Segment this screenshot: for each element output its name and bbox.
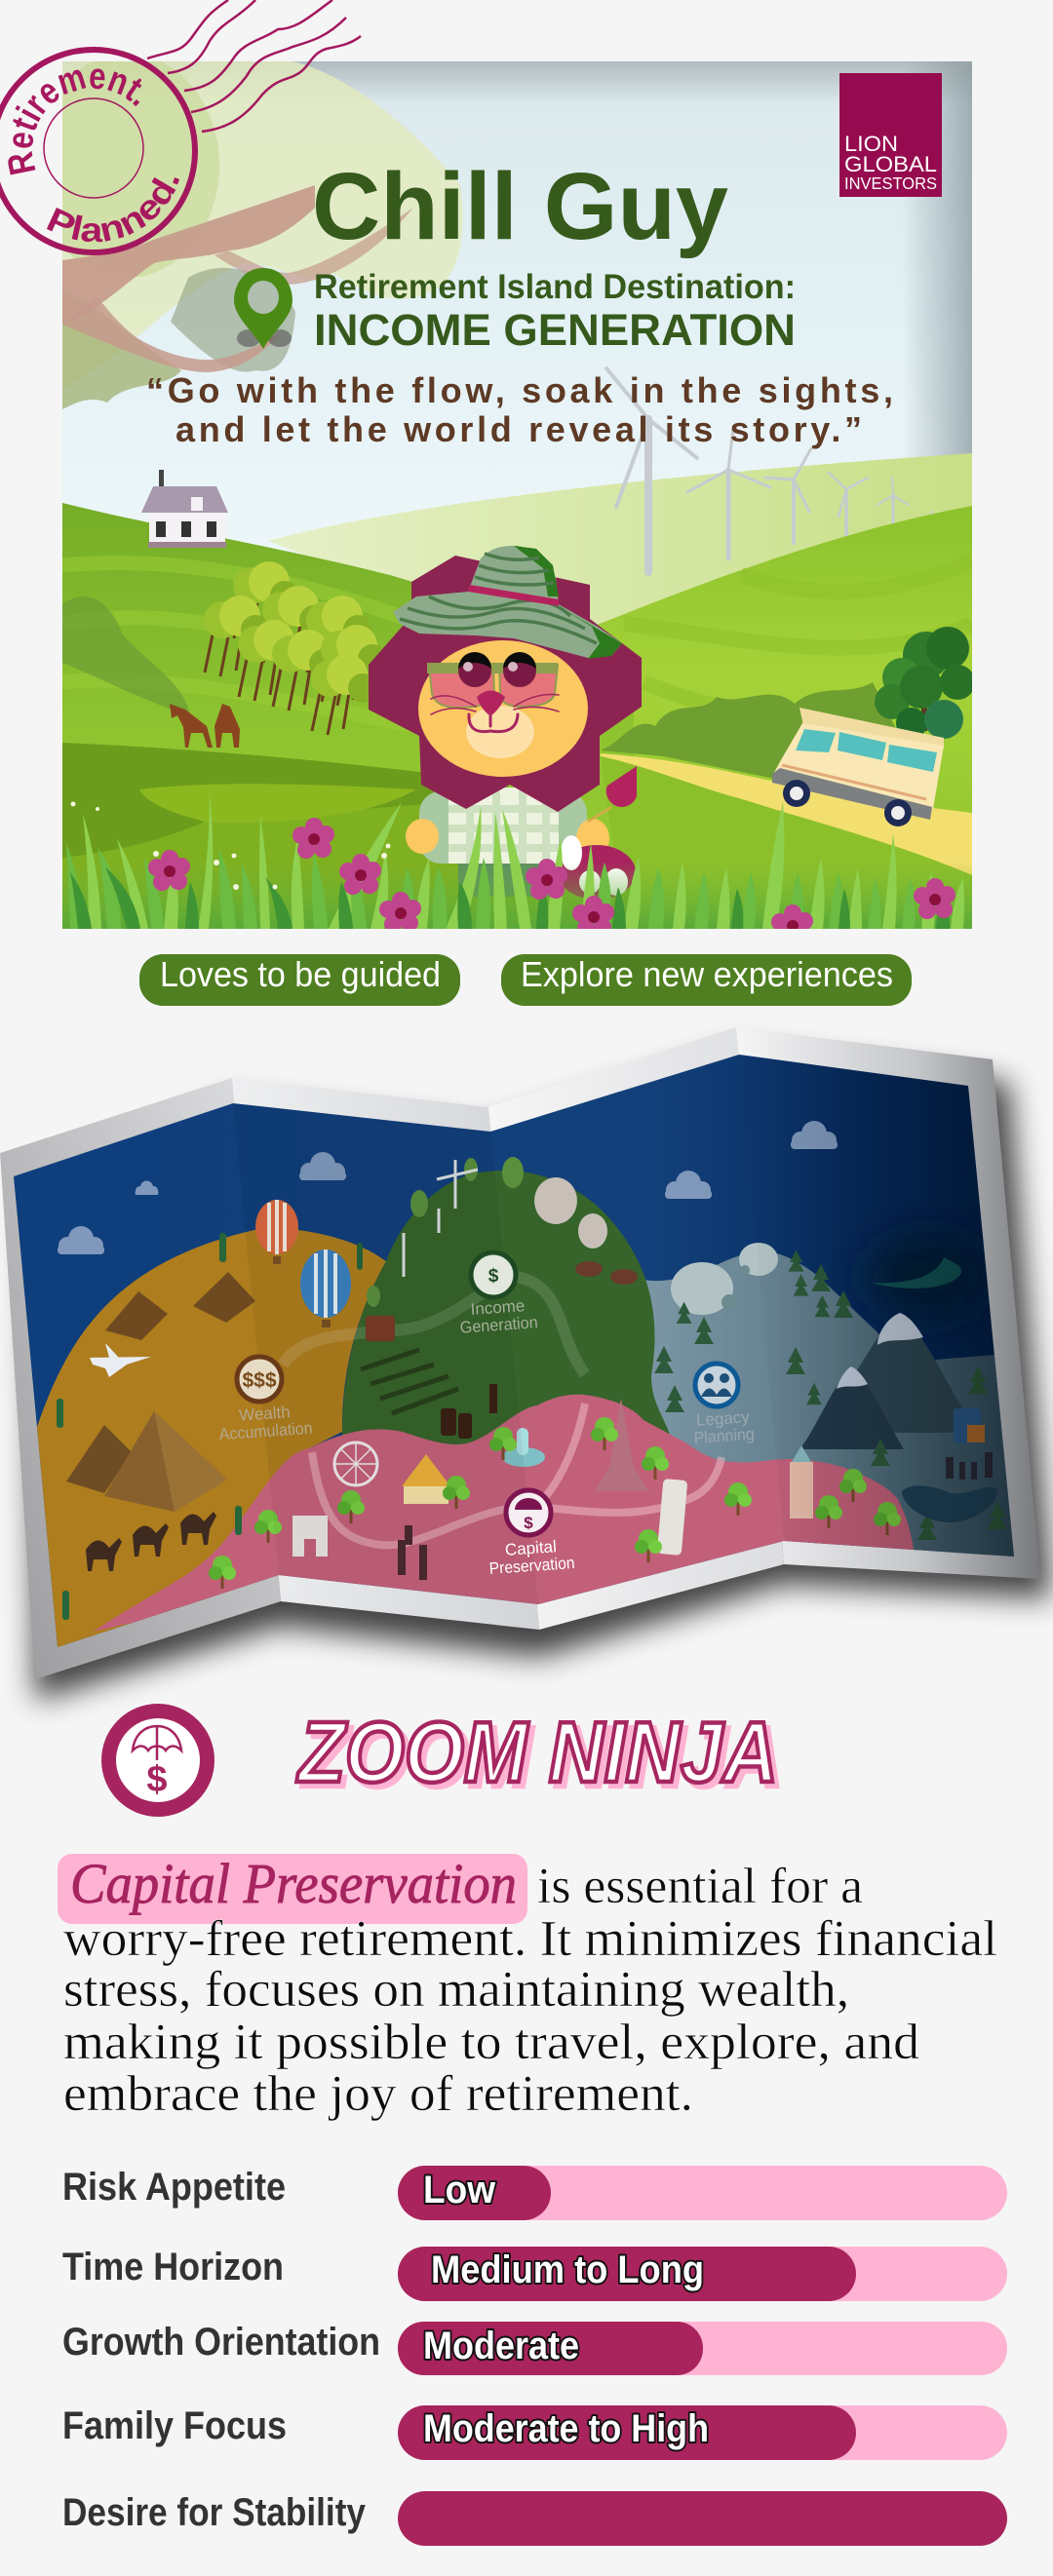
left hill (62, 503, 634, 795)
label: income generation: Income (470, 1296, 526, 1319)
map sky (14, 1055, 1014, 1647)
foreground hill base (62, 805, 630, 910)
right hill (597, 506, 972, 813)
postmark waves (147, 0, 361, 132)
map artwork (14, 1055, 1014, 1647)
attribute: risk appetite: Low (423, 2169, 496, 2211)
forest details (361, 1157, 638, 1439)
attribute: family focus (62, 2404, 1007, 2460)
logo: Lion Global Investors: INVESTORS (844, 173, 937, 193)
label: wealth accumulation: Wealth (239, 1403, 291, 1425)
lion shoe (558, 835, 636, 900)
panel: folded map (0, 1023, 1053, 1701)
attribute: risk appetite: Risk Appetite (62, 2166, 286, 2209)
aurora (868, 1238, 985, 1316)
front hill (610, 764, 952, 867)
label: capital preservation: Preservation (488, 1554, 575, 1578)
icon: capital preservation badge: $ (146, 1759, 168, 1800)
attribute: risk appetite (62, 2166, 1007, 2220)
icon: location pin (234, 268, 292, 349)
quote: “Go with the flow, soak in the sights, (146, 370, 893, 410)
attribute: time horizon (62, 2246, 1007, 2301)
icon: legacy planning (695, 1364, 738, 1406)
icon: wealth accumulation (237, 1357, 282, 1402)
cacti (57, 1233, 363, 1620)
pyramids (66, 1411, 227, 1512)
city roads (312, 1403, 722, 1545)
logo: Lion Global Investors (839, 73, 942, 197)
attribute: desire for stability (62, 2491, 1007, 2546)
clouds (58, 1121, 838, 1254)
label: legacy planning (692, 1407, 755, 1447)
attribute: growth orientation: Growth Orientation (62, 2321, 380, 2364)
attribute: family focus: Moderate to High (423, 2407, 709, 2450)
region: desert (0, 1227, 386, 1657)
igloos (671, 1243, 778, 1315)
description paragraph (63, 1859, 997, 2122)
attribute: desire for stability: Desire for Stability (62, 2491, 367, 2534)
title: Chill Guy (312, 153, 728, 259)
tents (105, 1272, 255, 1340)
hill stripes left (62, 556, 402, 710)
label: wealth accumulation (217, 1402, 313, 1443)
attribute: growth orientation: Moderate (423, 2325, 579, 2367)
lion mane (369, 556, 642, 812)
lion tail (588, 766, 637, 822)
sunglasses (427, 652, 558, 708)
camels (86, 1512, 216, 1571)
mountains (800, 1313, 968, 1449)
subtitle: Retirement Island Destination: (314, 268, 796, 306)
attribute: growth orientation (62, 2321, 1007, 2375)
lion nose, mouth and whiskers (431, 690, 559, 732)
logo: Lion Global Investors: GLOBAL (844, 152, 937, 176)
attribute: time horizon: Medium to Long (431, 2249, 704, 2291)
sky vignette (62, 61, 972, 457)
grass (62, 792, 972, 929)
description paragraph: worry-free retirement. It minimizes financial (63, 1911, 997, 1967)
lion mascot (369, 546, 642, 900)
map paper frame (0, 1027, 1040, 1679)
tree: right (875, 627, 975, 739)
region: ice land (634, 1252, 1019, 1559)
left bushes (62, 596, 190, 716)
attribute: family focus: Family Focus (62, 2404, 287, 2447)
frozen lake (902, 1485, 997, 1522)
description paragraph: stress, focuses on maintaining wealth, (63, 1962, 849, 2018)
right shrubs (601, 682, 907, 780)
label: legacy planning: Planning (693, 1425, 755, 1447)
tree canopy top left (34, 54, 463, 409)
icon: capital preservation (506, 1490, 551, 1535)
background pale hill (268, 453, 972, 625)
label: capital preservation: Capital (504, 1537, 557, 1559)
quote (146, 370, 893, 449)
wind turbines (606, 368, 932, 572)
snow trees (654, 1250, 1007, 1540)
tag pill: loves to be guided: Loves to be guided (160, 954, 441, 994)
postmark stamp (0, 47, 198, 255)
horses (170, 704, 240, 748)
flowers (148, 818, 956, 929)
lion body and shirt (406, 788, 609, 897)
icon: capital preservation: $ (524, 1514, 533, 1532)
mountain village and people (946, 1408, 993, 1480)
balloons (255, 1200, 351, 1327)
airplane (90, 1343, 151, 1377)
stamp text: Retirement. (8, 68, 142, 175)
label: wealth accumulation: Accumulation (218, 1419, 313, 1443)
label: capital preservation (488, 1536, 575, 1578)
highlight: capital preservation: Capital Preservation (70, 1852, 517, 1915)
landmark details (209, 1399, 901, 1589)
journey path (283, 1277, 585, 1374)
hill stripes right (624, 560, 972, 719)
foreground dark slope (62, 743, 546, 858)
persona name heading: ZOOM NINJA (295, 1704, 778, 1800)
road (601, 753, 972, 875)
farmhouse (141, 470, 228, 548)
attribute: time horizon: Time Horizon (62, 2246, 284, 2288)
label: income generation: Generation (459, 1313, 538, 1337)
foreground fold (139, 784, 416, 823)
sun hat (393, 546, 622, 659)
lion face (418, 640, 588, 777)
description paragraph: is essential for a (537, 1859, 863, 1914)
tag pill: explore new experiences: Explore new experiences (521, 954, 893, 994)
panel: hero scene (34, 54, 975, 945)
sky (62, 61, 972, 568)
label: income generation (458, 1295, 538, 1337)
icon: income generation: $ (488, 1266, 499, 1287)
region: pink city (94, 1395, 914, 1632)
destination heading: INCOME GENERATION (314, 305, 796, 355)
camper van (772, 708, 944, 827)
description paragraph: embrace the joy of retirement. (63, 2066, 693, 2122)
fold shading (233, 1055, 1014, 1604)
icon: income generation (471, 1252, 516, 1297)
icon: capital preservation badge (101, 1704, 214, 1817)
icon: wealth accumulation: $$$ (242, 1369, 277, 1392)
logo: Lion Global Investors: LION (844, 132, 898, 156)
quote: and let the world reveal its story.” (176, 409, 862, 449)
region: forest hill (342, 1171, 673, 1462)
map shadow (29, 1053, 1051, 1701)
vineyard (204, 561, 387, 735)
label: legacy planning: Legacy (695, 1407, 751, 1430)
description paragraph: making it possible to travel, explore, and (63, 2015, 919, 2070)
stamp text lower: Planned. (47, 177, 179, 242)
